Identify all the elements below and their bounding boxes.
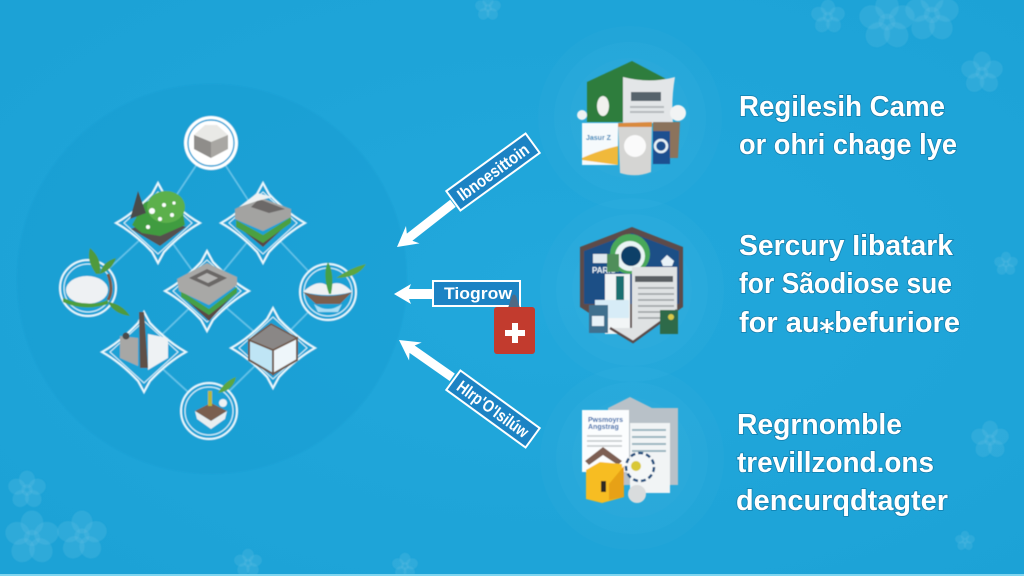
icon: shield house with newspaper: PARIS [592,266,617,275]
text block: third: dencurqdtagter [736,485,948,517]
node: green bush [116,183,200,263]
node: lower right glass block [231,308,315,388]
label tag: bottom: Hlrp'O'Isilúw [453,377,533,442]
icon: green box and supplies: Jasur Z [586,135,612,142]
text block: third [736,409,948,517]
icon: green box and supplies [577,61,686,175]
text block: first: or ohri chage lye [739,129,957,161]
node: left cloud and leaf [60,248,130,316]
node: centre block [165,251,249,331]
label tag: middle: Tiogrow [444,284,513,303]
icon: shield house with newspaper [580,227,683,342]
icon: red first aid kit [494,294,535,354]
arrow: top [390,133,540,256]
text block: third: Regrnomble [737,409,902,441]
text block: second: for au⁎befuriore [739,307,960,339]
text block: second [739,230,960,339]
arrow: bottom [393,331,540,448]
text block: second: for Sãodiose sue [739,268,952,300]
node: top rock [184,116,238,170]
connector lines [88,143,328,411]
node: stone block upper right [221,183,305,263]
arrow: middle [394,281,520,306]
panel: network circle [17,84,407,474]
text block: third: trevillzond.ons [737,447,934,479]
node: bottom seedling [181,377,237,439]
node: lower left towers [102,312,186,392]
icon: documents and padlock [582,397,678,503]
node: right plant [300,262,366,320]
rings behind right icons [538,26,724,550]
text block: first [739,91,957,161]
text block: second: Sercury Iibatark [739,230,954,262]
icon: documents and padlock: Angstrag [588,424,619,431]
icon: documents and padlock: Pwsmoyrs [588,417,623,424]
label tag: top: Ibnoesittoin [454,140,533,205]
text block: first: Regilesih Came [739,91,945,123]
